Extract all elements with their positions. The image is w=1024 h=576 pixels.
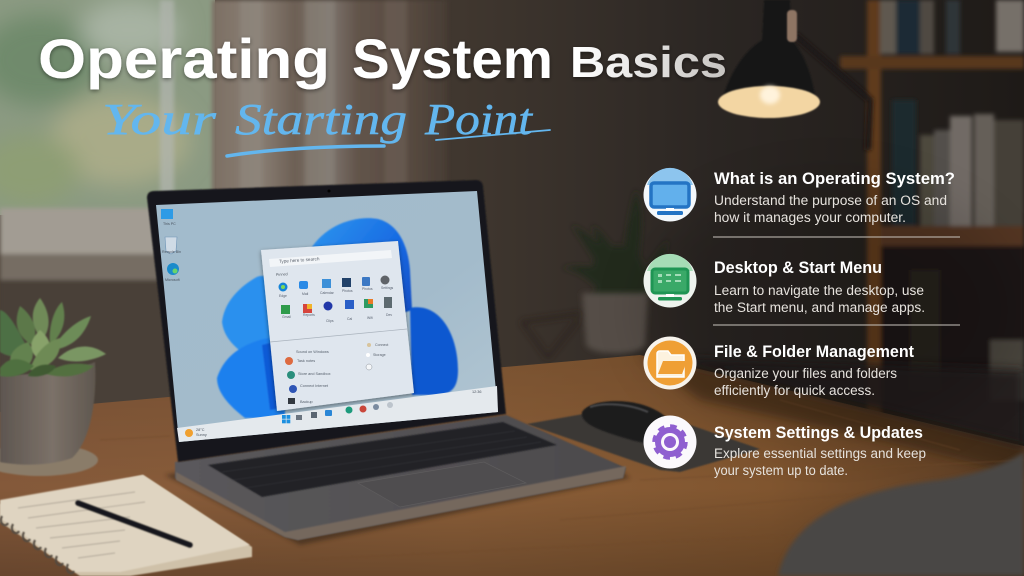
description xyxy=(714,283,925,315)
description xyxy=(714,446,926,478)
lid bezel xyxy=(147,180,506,462)
pinned app labels: Settings xyxy=(381,286,394,290)
start menu panel: Pinned xyxy=(276,272,288,277)
recommended list: Store and Sandbox xyxy=(298,372,331,376)
webcam xyxy=(328,190,330,192)
soft dark wash behind the text column xyxy=(640,180,1020,440)
curtain xyxy=(212,0,447,360)
item: What is an Operating System? xyxy=(644,168,955,225)
pinned app labels: Calendar xyxy=(320,291,335,295)
description: efficiently for quick access. xyxy=(714,383,875,398)
quick settings: Connect xyxy=(375,343,388,347)
subtitle: Your Starting Point: Point xyxy=(424,95,534,144)
recommended list: Backup xyxy=(300,400,313,404)
description: Learn to navigate the desktop, use xyxy=(714,283,924,298)
heading: What is an Operating System? xyxy=(714,170,955,188)
pinned app labels: Dev xyxy=(386,313,392,317)
desktop icons xyxy=(161,209,181,282)
pinned app labels: Gmail xyxy=(282,315,291,319)
item: File & Folder Management xyxy=(644,336,914,398)
start menu panel xyxy=(261,241,414,411)
description xyxy=(714,366,897,398)
spiral binding xyxy=(1,516,74,573)
title: Operating xyxy=(38,27,330,90)
taskbar app icons xyxy=(296,402,393,420)
desktop icons: This PC xyxy=(163,222,176,226)
recommended list: Task notes xyxy=(297,359,315,363)
wireless mouse xyxy=(582,401,674,444)
clock: 12:36 xyxy=(472,390,482,394)
trackpad xyxy=(358,462,526,507)
recommended list: Connect Internet xyxy=(300,384,329,388)
keyboard xyxy=(208,422,557,497)
notebook with pen xyxy=(0,475,252,576)
description: Organize your files and folders xyxy=(714,366,897,381)
desktop icons: Microsoft xyxy=(165,278,180,282)
subtitle: Your Starting Point: Your xyxy=(102,95,217,144)
saucer xyxy=(0,444,98,476)
background stool xyxy=(522,314,580,358)
taskbar xyxy=(177,386,498,442)
recommended list xyxy=(285,350,331,404)
heading: System Settings & Updates xyxy=(714,424,923,442)
screen wallpaper xyxy=(156,191,498,442)
icon: monitor xyxy=(644,168,696,222)
description: the Start menu, and manage apps. xyxy=(714,300,925,315)
quick settings xyxy=(366,343,388,370)
subtitle: Your Starting Point xyxy=(102,95,550,156)
bookshelf xyxy=(840,0,1024,440)
subtitle: Your Starting Point: Starting xyxy=(235,95,407,144)
recommended list: Sound on Windows xyxy=(296,350,329,354)
mouse pad and mouse xyxy=(527,401,760,472)
title: System xyxy=(352,27,553,90)
pinned app labels: Edge xyxy=(279,294,287,298)
heading: File & Folder Management xyxy=(714,343,914,361)
pinned app labels: Mail xyxy=(302,292,308,296)
desk xyxy=(0,355,1024,576)
pinned app labels: Wifi xyxy=(367,316,373,320)
laptop base xyxy=(175,415,626,540)
laptop xyxy=(147,180,630,545)
desktop icons: Recycle Bin xyxy=(162,250,181,254)
pinned app labels: Cal xyxy=(347,317,352,321)
description: Understand the purpose of an OS and xyxy=(714,193,947,208)
icon: desktop with start menu xyxy=(644,254,696,308)
pinned app labels: Photos xyxy=(342,289,353,293)
pen xyxy=(78,503,190,545)
search box: Type here to search xyxy=(279,256,320,264)
leaves xyxy=(0,298,106,377)
icon: gear xyxy=(644,416,696,468)
grey chair back xyxy=(778,452,1024,576)
weather widget: Sunny xyxy=(196,433,207,437)
windows logo xyxy=(282,415,290,423)
window sill and lower wall xyxy=(0,208,215,420)
background potted plant xyxy=(562,190,668,353)
weather widget: 28°C xyxy=(196,428,205,432)
description: your system up to date. xyxy=(714,463,848,478)
desk lamp xyxy=(718,0,870,178)
title: Basics xyxy=(570,38,727,87)
subtitle underline strokes xyxy=(227,130,550,156)
feature list xyxy=(644,168,960,478)
pinned app icons xyxy=(278,276,392,314)
title xyxy=(38,27,727,90)
description xyxy=(714,193,947,225)
heading: Desktop & Start Menu xyxy=(714,259,882,277)
description: Explore essential settings and keep xyxy=(714,446,926,461)
wallpaper bloom xyxy=(217,218,458,418)
pinned app labels xyxy=(279,286,394,323)
weather widget xyxy=(185,428,207,437)
handwritten notes xyxy=(18,492,145,558)
item: System Settings & Updates xyxy=(644,416,926,478)
quick settings: Storage xyxy=(373,353,386,357)
window with blurred garden xyxy=(0,0,215,215)
pinned app labels: Clips xyxy=(326,319,334,323)
search box xyxy=(269,250,392,267)
pot xyxy=(0,362,95,465)
pinned app labels: Reports xyxy=(303,313,315,317)
icon: folder xyxy=(644,336,696,390)
succulent in pot xyxy=(0,298,106,476)
item: Desktop & Start Menu xyxy=(644,254,925,315)
pinned app labels: Photos xyxy=(362,287,373,291)
description: how it manages your computer. xyxy=(714,210,906,225)
